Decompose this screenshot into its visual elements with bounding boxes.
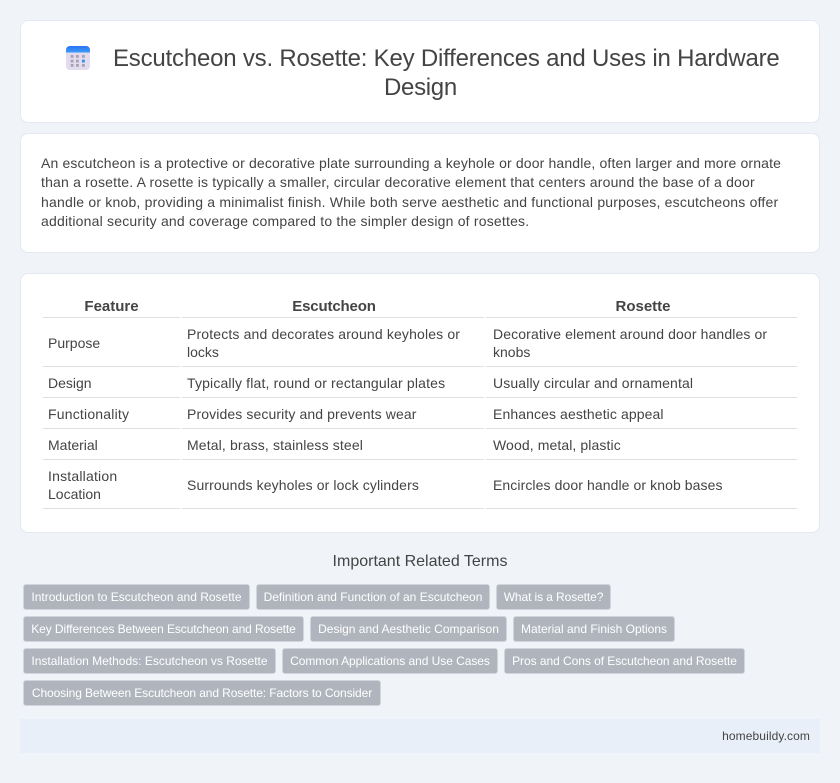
tag: Material and Finish Options <box>521 622 667 636</box>
text block: definition: An escutcheon is a protective or decorative plate surrounding a keyhole or door handle, often larger and more ornate <box>41 155 781 171</box>
row: installation location: Surrounds keyholes or lock cylinders <box>187 477 419 493</box>
row: design: Usually circular and ornamental <box>493 375 693 391</box>
tag: What is a Rosette? <box>504 590 603 604</box>
row: functionality: Provides security and prevents wear <box>187 406 417 422</box>
row: installation location: Encircles door handle or knob bases <box>493 477 723 493</box>
panel: title card <box>20 20 820 123</box>
row: installation location: Installation <box>48 468 117 484</box>
tag <box>310 616 507 642</box>
heading: related terms: Important Related Terms <box>333 553 507 570</box>
table header: Escutcheon <box>292 298 376 315</box>
row: purpose: Decorative element around door handles or <box>493 326 767 342</box>
text block: definition: handle or knob, providing a minimalist finish. While both serve aesthetic and functional purposes, escutcheons offer <box>41 194 778 210</box>
panel: comparison table <box>20 273 820 533</box>
table header: Feature <box>84 298 139 315</box>
row: functionality: Functionality <box>48 406 129 422</box>
tag <box>23 616 304 642</box>
tag <box>513 616 675 642</box>
tag: Choosing Between Escutcheon and Rosette: Factors to Consider <box>32 686 372 700</box>
text block: definition: than a rosette. A rosette is typically a smaller, circular decorative element that centers around the base of a door <box>41 174 755 190</box>
row: purpose: Protects and decorates around keyholes or <box>187 326 460 342</box>
tag: Installation Methods: Escutcheon vs Rosette <box>31 654 268 668</box>
row: material <box>48 437 621 453</box>
tag <box>504 648 745 674</box>
text block: definition: additional security and coverage compared to the simpler design of rosettes. <box>41 213 529 229</box>
row: design: Typically flat, round or rectangular plates <box>187 375 445 391</box>
tag: Common Applications and Use Cases <box>290 654 490 668</box>
tag <box>23 584 250 610</box>
row: material: Material <box>48 437 98 453</box>
row: material: Wood, metal, plastic <box>493 437 621 453</box>
table header <box>84 298 670 315</box>
tag: Key Differences Between Escutcheon and Rosette <box>31 622 296 636</box>
tag <box>23 648 276 674</box>
tag: Definition and Function of an Escutcheon <box>264 590 482 604</box>
text block: definition <box>41 155 781 229</box>
tag: Introduction to Escutcheon and Rosette <box>31 590 242 604</box>
tag <box>256 584 490 610</box>
icon: calendar <box>66 46 90 70</box>
row: functionality: Enhances aesthetic appeal <box>493 406 664 422</box>
tag: Design and Aesthetic Comparison <box>318 622 499 636</box>
row: purpose <box>48 326 767 360</box>
footer source text: homebuildy.com <box>722 729 810 743</box>
row: functionality <box>48 406 664 422</box>
tag <box>23 680 381 706</box>
row: purpose: knobs <box>493 344 530 360</box>
row: purpose: Purpose <box>48 335 100 351</box>
row: design: Design <box>48 375 92 391</box>
table header: Rosette <box>615 298 670 315</box>
row: installation location <box>48 468 723 502</box>
row: purpose: locks <box>187 344 219 360</box>
row: material: Metal, brass, stainless steel <box>187 437 363 453</box>
footer bar <box>20 719 820 753</box>
title <box>113 45 780 101</box>
tag <box>282 648 498 674</box>
row: design <box>48 375 693 391</box>
tag: Pros and Cons of Escutcheon and Rosette <box>512 654 737 668</box>
title: Escutcheon vs. Rosette: Key Differences and Uses in Hardware <box>113 45 780 72</box>
tag <box>496 584 611 610</box>
title: Design <box>384 74 457 101</box>
row: installation location: Location <box>48 486 101 502</box>
panel: intro paragraph <box>20 133 820 253</box>
panel: related term tags <box>23 584 745 706</box>
